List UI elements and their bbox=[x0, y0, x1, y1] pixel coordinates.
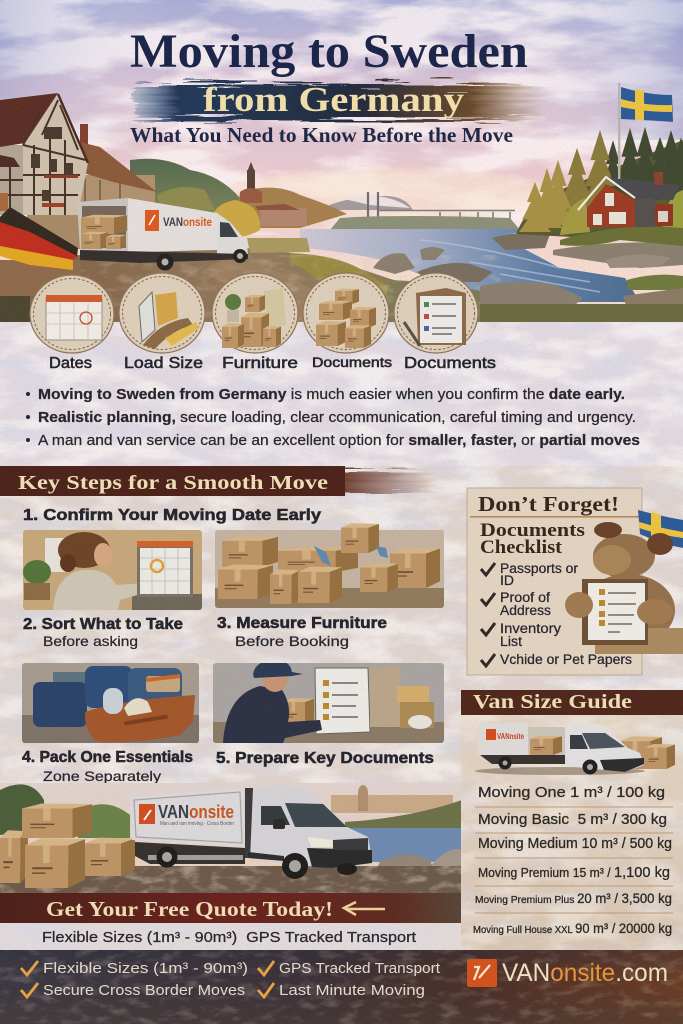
step 3 text: Before Booking bbox=[235, 633, 349, 649]
step 4 illustration: luggage bbox=[22, 663, 199, 743]
badge labels: Furniture bbox=[222, 355, 298, 372]
checklist items bbox=[481, 561, 632, 667]
icon: Swedish flag small bbox=[638, 510, 683, 548]
documents checklist heading: Checklist bbox=[480, 538, 563, 558]
size rows: Moving One 1 m³ / 100 kg bbox=[478, 784, 665, 801]
German half-timbered houses bbox=[0, 93, 157, 249]
size rows: Moving Premium Plus 20 m³ / 3,500 kg bbox=[475, 891, 672, 906]
icon row: circular topic badges bbox=[30, 273, 478, 353]
documents checklist heading bbox=[480, 521, 585, 558]
steps paper panel bbox=[0, 466, 683, 786]
footer feature list: GPS Tracked Transport bbox=[279, 960, 441, 977]
stacked cardboard boxes bbox=[0, 803, 135, 888]
distant hills and bridge bbox=[130, 159, 520, 238]
footer band bbox=[0, 950, 683, 1024]
badge labels: Documents bbox=[312, 355, 392, 370]
left ground, grass and road bbox=[0, 238, 500, 322]
icon: boxes badge bbox=[303, 273, 389, 353]
step 2 text: 2. Sort What to Take bbox=[23, 616, 183, 633]
checklist items: ID bbox=[500, 573, 514, 588]
key steps banner bbox=[0, 466, 435, 496]
features strip: Flexible Sizes (1m³ - 90m³) GPS Tracked Transport bbox=[42, 930, 416, 946]
German flag bbox=[0, 207, 80, 322]
badge labels: Documents bbox=[404, 355, 496, 372]
white moving truck: VANonsite bbox=[163, 215, 212, 229]
size rows: Moving Medium 10 m³ / 500 kg bbox=[478, 836, 672, 852]
bottom truck scene bbox=[0, 783, 462, 895]
step 3 illustration: cardboard boxes bbox=[215, 523, 444, 608]
step 3 text: 3. Measure Furniture bbox=[217, 615, 387, 632]
key steps banner: Key Steps for a Smooth Move bbox=[18, 472, 328, 494]
size rows: Moving Full House XXL 90 m³ / 20000 kg bbox=[473, 921, 672, 936]
icon: load size badge bbox=[119, 273, 205, 353]
step 5 text: 5. Prepare Key Documents bbox=[216, 750, 434, 767]
intro bullet list bbox=[26, 386, 640, 449]
checklist items: Proof of bbox=[500, 590, 550, 605]
van size guide heading bbox=[461, 690, 683, 715]
large branded van: Man and van moving · Cross Border bbox=[160, 821, 234, 827]
river water bbox=[300, 229, 640, 302]
rocky shoreline bbox=[373, 233, 683, 322]
icon: furniture badge bbox=[212, 273, 298, 353]
panel heading: Don’t Forget! bbox=[478, 492, 619, 516]
large branded van bbox=[130, 785, 372, 879]
checklist items: Address bbox=[500, 603, 551, 618]
footer feature list: Last Minute Moving bbox=[279, 982, 425, 999]
intro bullet list: Realistic planning, secure loading, clear ccommunication, careful timing and urgency. bbox=[38, 409, 636, 426]
van size guide panel bbox=[461, 715, 683, 950]
badge labels: Dates bbox=[49, 355, 92, 372]
step 3 text bbox=[217, 615, 387, 649]
intro bullet list: A man and van service can be an excellent option for smaller, faster, or partial moves bbox=[38, 432, 640, 449]
Swedish forest bbox=[516, 127, 683, 246]
size rows: Moving Basic 5 m³ / 300 kg bbox=[478, 811, 667, 828]
red Swedish house bbox=[578, 172, 680, 227]
step 2 text bbox=[23, 616, 183, 649]
footer feature list: Flexible Sizes (1m³ - 90m³) bbox=[43, 960, 248, 977]
tagline: What You Need to Know Before the Move bbox=[130, 123, 513, 147]
subtitle banner: from Germany: from Germany bbox=[203, 80, 465, 119]
step 4 text: 4. Pack One Essentials bbox=[22, 749, 193, 766]
church tower bbox=[240, 162, 262, 203]
step 1 heading: 1. Confirm Your Moving Date Early bbox=[23, 507, 321, 524]
hero landscape background bbox=[0, 0, 683, 325]
size rows: Moving Premium 15 m³ / 1,100 kg bbox=[478, 864, 670, 881]
footer feature list: Secure Cross Border Moves bbox=[43, 982, 245, 999]
icon: small van bbox=[475, 723, 675, 775]
Swedish flag on pole bbox=[618, 83, 673, 179]
icon: small van: VANnsite bbox=[497, 732, 524, 741]
checklist items: List bbox=[500, 634, 522, 649]
icon: calendar badge bbox=[30, 275, 114, 353]
van size guide heading: Van Size Guide bbox=[473, 692, 632, 713]
features strip bbox=[0, 923, 461, 951]
checklist items: Inventory bbox=[500, 621, 561, 636]
badge labels bbox=[49, 355, 496, 372]
step 2 text: Before asking bbox=[43, 633, 138, 649]
intro paper panel bbox=[0, 322, 683, 468]
title: Moving to Sweden bbox=[130, 25, 528, 78]
footer feature list bbox=[21, 960, 441, 999]
large branded van: VANonsite bbox=[158, 802, 234, 822]
step 5 illustration: man with checklist bbox=[213, 660, 444, 743]
step 4 text bbox=[22, 749, 193, 784]
step 4 text: Zone Separately bbox=[43, 768, 161, 784]
subtitle banner: from Germany bbox=[135, 80, 545, 120]
arrow bbox=[344, 902, 385, 915]
intro bullet list: Moving to Sweden from Germany is much easier when you confirm the date early. bbox=[38, 386, 625, 403]
checklist items: Vchide or Pet Papers bbox=[500, 652, 632, 667]
don't forget checklist panel bbox=[467, 488, 642, 675]
icon: teddy bear with clipboard bbox=[565, 522, 683, 654]
quote call-to-action banner: Get Your Free Quote Today! bbox=[46, 897, 333, 921]
step 1 illustration: woman at calendar bbox=[23, 530, 202, 610]
footer logo: VANonsite.com bbox=[502, 959, 668, 987]
size rows bbox=[473, 784, 673, 936]
checklist items: Passports or bbox=[500, 561, 579, 576]
documents checklist heading: Documents bbox=[480, 521, 585, 541]
icon: clipboard badge bbox=[394, 273, 478, 353]
badge labels: Load Size bbox=[124, 355, 203, 372]
white moving truck bbox=[77, 198, 248, 270]
quote call-to-action banner bbox=[0, 893, 461, 923]
